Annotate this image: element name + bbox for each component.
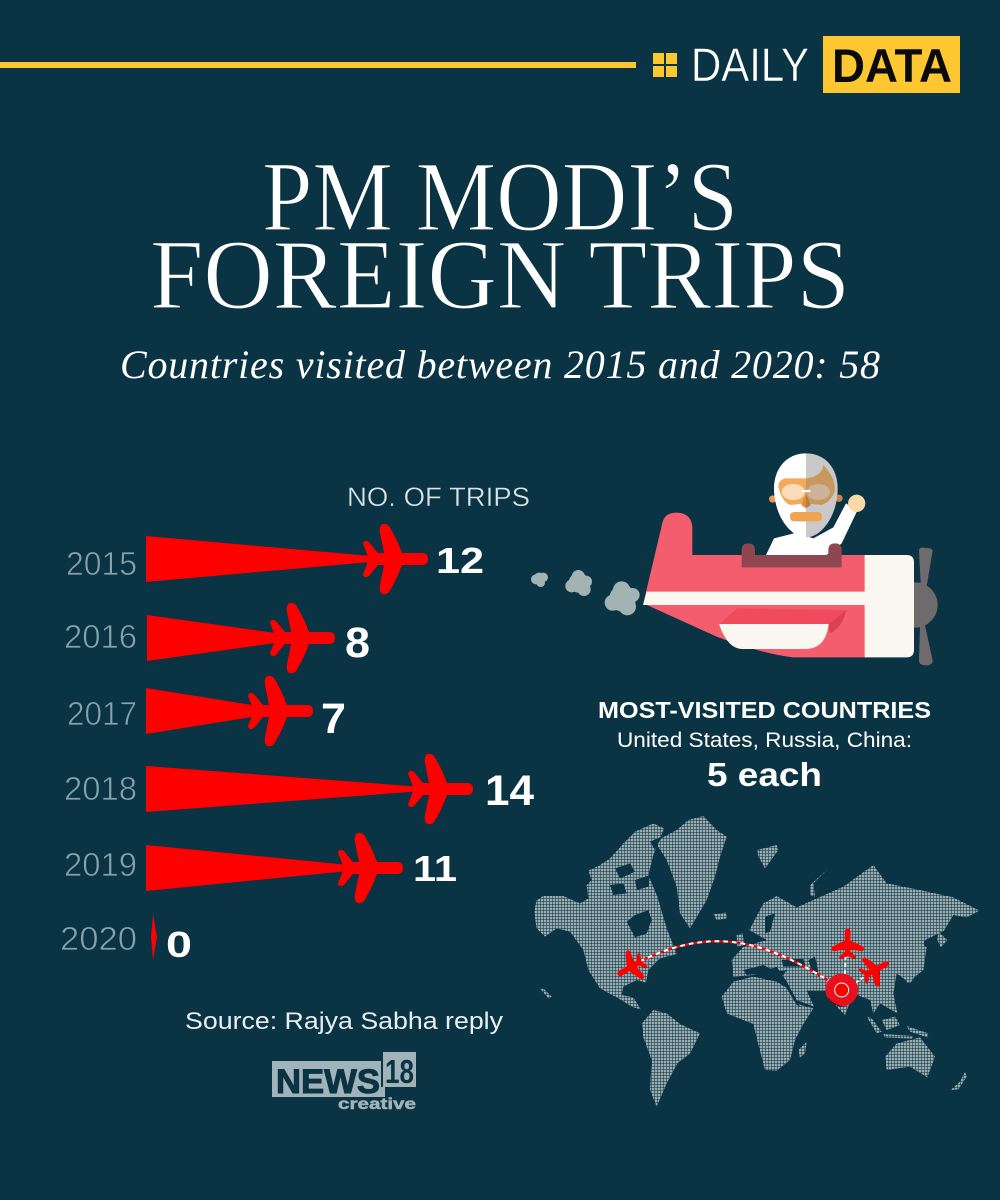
row 2019: 2019 — [64, 846, 137, 883]
fuselage stripe — [643, 592, 867, 605]
row 2015: 2015 — [66, 545, 137, 582]
row 2016: 8 — [345, 619, 370, 667]
propeller — [892, 548, 938, 665]
news18 creative logo: creative — [338, 1096, 416, 1113]
smoke puffs — [531, 570, 640, 615]
nose cowling — [865, 555, 914, 657]
daily data logo — [653, 36, 960, 93]
sea cut-outs — [610, 837, 818, 1007]
plane: north — [831, 929, 864, 959]
title: PM MODI’S — [262, 141, 738, 252]
most-visited countries callout: 5 each — [707, 756, 822, 793]
continents — [534, 816, 979, 1107]
row 2019: 11 — [413, 848, 457, 889]
row 2018: 2018 — [64, 770, 137, 807]
daily data logo: DAILY — [691, 38, 809, 91]
row 2019 — [64, 833, 457, 903]
title — [150, 141, 850, 330]
plane: east — [855, 948, 896, 991]
header rule — [0, 62, 636, 68]
row 2016 — [64, 603, 370, 673]
news18 creative logo — [272, 1052, 416, 1113]
row 2015: 12 — [436, 540, 484, 581]
most-visited countries callout: MOST-VISITED COUNTRIES — [598, 697, 931, 723]
bar chart: trips per year — [60, 524, 534, 965]
row 2018 — [64, 754, 534, 824]
most-visited countries callout — [598, 697, 931, 793]
cockpit — [742, 543, 842, 567]
row 2020: 2020 — [60, 920, 137, 957]
row 2016: 2016 — [64, 618, 137, 655]
row 2020: 0 — [166, 924, 192, 965]
most-visited countries callout: United States, Russia, China: — [617, 729, 912, 752]
source note: Source: Rajya Sabha reply — [185, 1008, 503, 1035]
marker: India — [825, 974, 858, 1006]
daily data logo: DATA — [832, 39, 952, 92]
wing — [719, 608, 846, 649]
subtitle: Countries visited between 2015 and 2020: 58 — [120, 342, 880, 387]
row 2020 — [60, 914, 192, 965]
flight route to USA — [642, 941, 867, 983]
row 2018: 14 — [485, 767, 534, 815]
title: FOREIGN TRIPS — [150, 219, 850, 330]
row 2017: 2017 — [67, 695, 137, 732]
row 2015 — [66, 524, 484, 594]
chart heading: NO. OF TRIPS — [347, 482, 530, 512]
pilot — [766, 453, 865, 555]
news18 creative logo: 18 — [385, 1053, 414, 1090]
row 2017: 7 — [321, 695, 346, 743]
plane: USA — [610, 946, 652, 989]
row 2017 — [67, 676, 346, 746]
news18 creative logo: NEWS — [276, 1063, 380, 1101]
fuselage — [643, 513, 867, 657]
illustration: pilot in red plane — [531, 453, 938, 665]
dotted world map — [534, 816, 979, 1107]
